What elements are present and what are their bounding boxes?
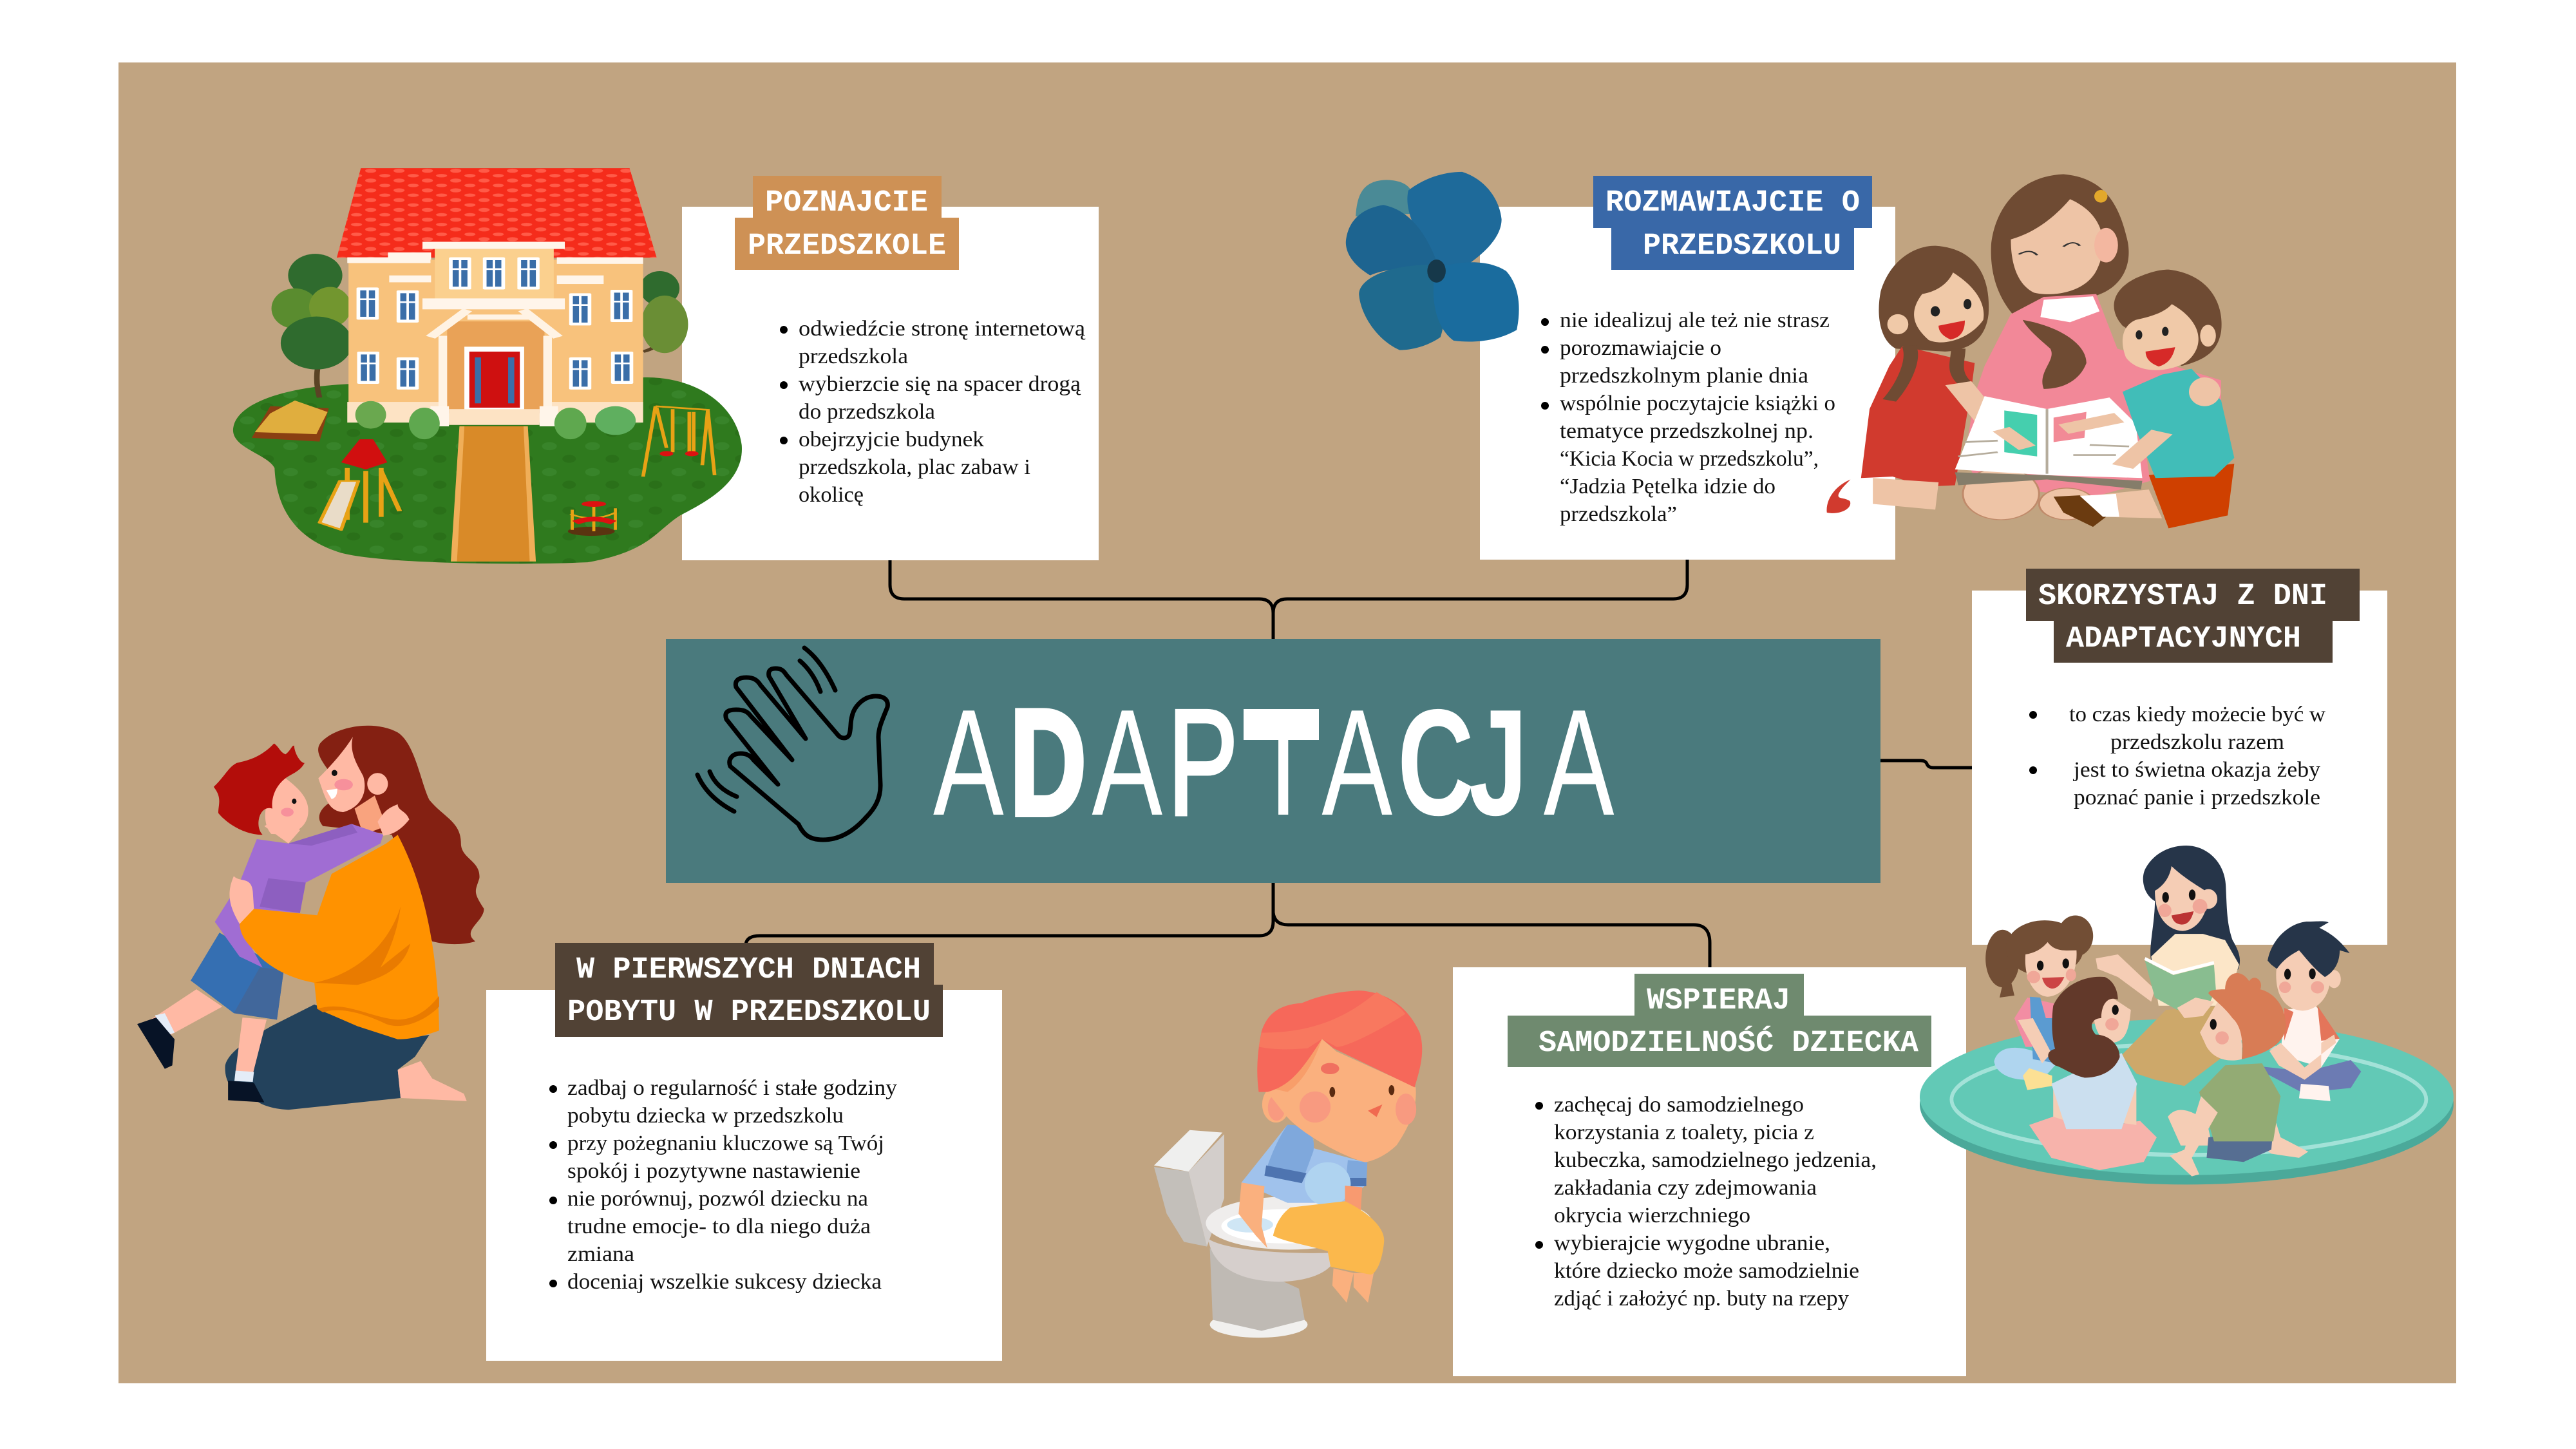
bullet list: poznać panie i przedszkole	[2074, 786, 2320, 810]
connector: top branches	[890, 560, 1687, 639]
footpath	[451, 426, 536, 562]
bullet list: kubeczka, samodzielnego jedzenia,	[1554, 1148, 1877, 1172]
girl seen from behind	[2029, 977, 2157, 1170]
child hand	[377, 804, 409, 836]
windows	[357, 258, 633, 390]
title text: C	[1397, 677, 1474, 847]
title text: P	[1168, 677, 1238, 847]
title background	[666, 639, 1880, 883]
bullet list: przedszkola	[799, 345, 908, 368]
bullet list: jest to świetna okazja żeby	[2073, 758, 2320, 782]
sandbox	[252, 401, 329, 442]
heading	[555, 943, 943, 1037]
roof	[337, 168, 657, 258]
bullet list: przedszkola”	[1560, 502, 1677, 526]
boy	[2054, 270, 2234, 528]
heading	[1508, 974, 1931, 1067]
bullet list: wybierajcie wygodne ubranie,	[1554, 1231, 1830, 1255]
heading	[735, 176, 959, 270]
illustration: mother hugging child	[137, 726, 484, 1110]
bullet list: wspólnie poczytajcie książki o	[1560, 392, 1835, 415]
toilet	[1154, 1130, 1372, 1338]
bullet list: do przedszkola	[799, 400, 935, 424]
heading: W PIERWSZYCH DNIACH	[576, 953, 921, 987]
bullet list: doceniaj wszelkie sukcesy dziecka	[567, 1270, 882, 1294]
bullet list: które dziecko może samodzielnie	[1554, 1259, 1859, 1283]
mother sweater	[240, 835, 439, 1039]
slide tower	[319, 439, 400, 530]
bullet list: przedszkolnym planie dnia	[1560, 364, 1808, 388]
panel: skorzystaj z dni adaptacyjnych	[1972, 569, 2387, 945]
illustration: blue flower	[1346, 172, 1519, 350]
bullet list: okolicę	[799, 483, 864, 507]
bushes	[355, 401, 636, 439]
bullet list: okrycia wierzchniego	[1554, 1204, 1750, 1227]
panel: poznajcie przedszkole	[682, 176, 1099, 560]
boy head	[1257, 990, 1422, 1162]
illustration: child on toilet	[1154, 990, 1422, 1338]
heading: ROZMAWIAJCIE O	[1605, 186, 1860, 220]
bullet list: nie idealizuj ale też nie strasz	[1560, 308, 1830, 332]
red fragment	[1827, 480, 1850, 513]
bullet list: “Jadzia Pętelka idzie do	[1560, 475, 1776, 498]
boy with ginger hair	[2168, 973, 2308, 1177]
icon: waving hand	[697, 648, 887, 840]
door	[430, 346, 558, 426]
title text: A	[1544, 677, 1615, 847]
heading: WSPIERAJ	[1647, 984, 1790, 1018]
lawn	[233, 377, 742, 564]
child legs	[137, 989, 267, 1103]
boy with dark hair	[2251, 921, 2361, 1101]
bullet list: zakładania czy zdejmowania	[1554, 1176, 1817, 1200]
walls	[347, 242, 643, 422]
title text: A	[1321, 677, 1392, 847]
heading: POBYTU W PRZEDSZKOLU	[567, 996, 931, 1030]
bullet list: porozmawiajcie o	[1560, 336, 1721, 360]
bullet list	[2029, 703, 2325, 810]
bullet list: odwiedźcie stronę internetową	[799, 317, 1086, 341]
heading: SAMODZIELNOŚĆ DZIECKA	[1539, 1026, 1919, 1061]
bullet list: przedszkolu razem	[2110, 730, 2284, 754]
child top	[215, 824, 383, 967]
bullet list: pobytu dziecka w przedszkolu	[567, 1104, 844, 1128]
illustration: teacher reading to children on rug	[1920, 846, 2454, 1184]
card	[1453, 967, 1966, 1376]
child head	[214, 743, 308, 844]
title text: J	[1469, 677, 1528, 847]
bullet list	[1541, 308, 1835, 526]
card	[682, 207, 1099, 560]
bullet list: wybierzcie się na spacer drogą	[799, 372, 1081, 396]
mother face	[318, 737, 388, 835]
bullet list	[549, 1076, 897, 1294]
bullet list: obejrzyjcie budynek	[799, 428, 984, 451]
illustration: kindergarten building	[233, 168, 742, 564]
mother legs	[225, 1005, 467, 1110]
connector: bottom branches	[746, 883, 1710, 967]
bullet list: przedszkola, plac zabaw i	[799, 455, 1030, 479]
title text: D	[1010, 677, 1086, 847]
heading	[2026, 569, 2360, 663]
bullet list: korzystania z toalety, picia z	[1554, 1121, 1814, 1144]
central title block	[666, 639, 1880, 883]
panel: w pierwszych dniach pobytu	[486, 943, 1002, 1361]
title text: A	[933, 677, 1004, 847]
heading: SKORZYSTAJ Z DNI	[2038, 580, 2327, 614]
swing set	[643, 406, 715, 477]
mother hand on child	[229, 876, 254, 924]
bullet list: spokój i pozytywne nastawienie	[567, 1159, 860, 1183]
bullet list: zachęcaj do samodzielnego	[1554, 1093, 1804, 1117]
book	[1955, 396, 2143, 489]
illustration: mother and children reading	[1827, 174, 2234, 528]
bullet list: nie porównuj, pozwól dziecku na	[567, 1187, 868, 1211]
heading: POZNAJCIE	[765, 186, 928, 220]
heading	[1593, 176, 1872, 270]
heading: PRZEDSZKOLE	[748, 229, 946, 263]
panel: rozmawiajcie o przedszkolu	[1480, 176, 1895, 560]
connector: right branch	[1880, 761, 1972, 768]
bullet list	[780, 317, 1086, 507]
panel: wspieraj samodzielność dziecka	[1453, 967, 1966, 1376]
bullet list: zadbaj o regularność i stałe godziny	[567, 1076, 897, 1100]
bullet list: “Kicia Kocia w przedszkolu”,	[1560, 447, 1819, 471]
bullet list: tematyce przedszkolnej np.	[1560, 419, 1814, 443]
title text	[933, 677, 1615, 847]
bullet list: przy pożegnaniu kluczowe są Twój	[567, 1132, 884, 1155]
title text: T	[1251, 677, 1316, 847]
bullet list: trudne emocje- to dla niego duża	[567, 1215, 871, 1238]
carousel	[568, 501, 616, 536]
bullet list: to czas kiedy możecie być w	[2069, 703, 2325, 726]
girl with pigtails	[1985, 915, 2093, 1090]
child shorts	[191, 933, 284, 1019]
mother hair	[318, 726, 484, 944]
boy arms and shirt	[1238, 1125, 1367, 1248]
trees	[272, 254, 688, 397]
card	[1972, 591, 2387, 945]
bullet list	[1535, 1093, 1877, 1311]
bullet list: zmiana	[567, 1242, 634, 1266]
mother	[1963, 174, 2221, 520]
card	[486, 990, 1002, 1361]
heading: ADAPTACYJNYCH	[2066, 622, 2301, 656]
card	[1480, 207, 1895, 560]
heading: PRZEDSZKOLU	[1643, 229, 1841, 263]
bullet list: zdjąć i założyć np. buty na rzepy	[1554, 1287, 1849, 1311]
boy trousers and legs	[1273, 1201, 1384, 1303]
title text: A	[1092, 677, 1162, 847]
rug	[1920, 1019, 2454, 1184]
teacher	[2096, 846, 2240, 1086]
girl	[1861, 246, 2007, 509]
